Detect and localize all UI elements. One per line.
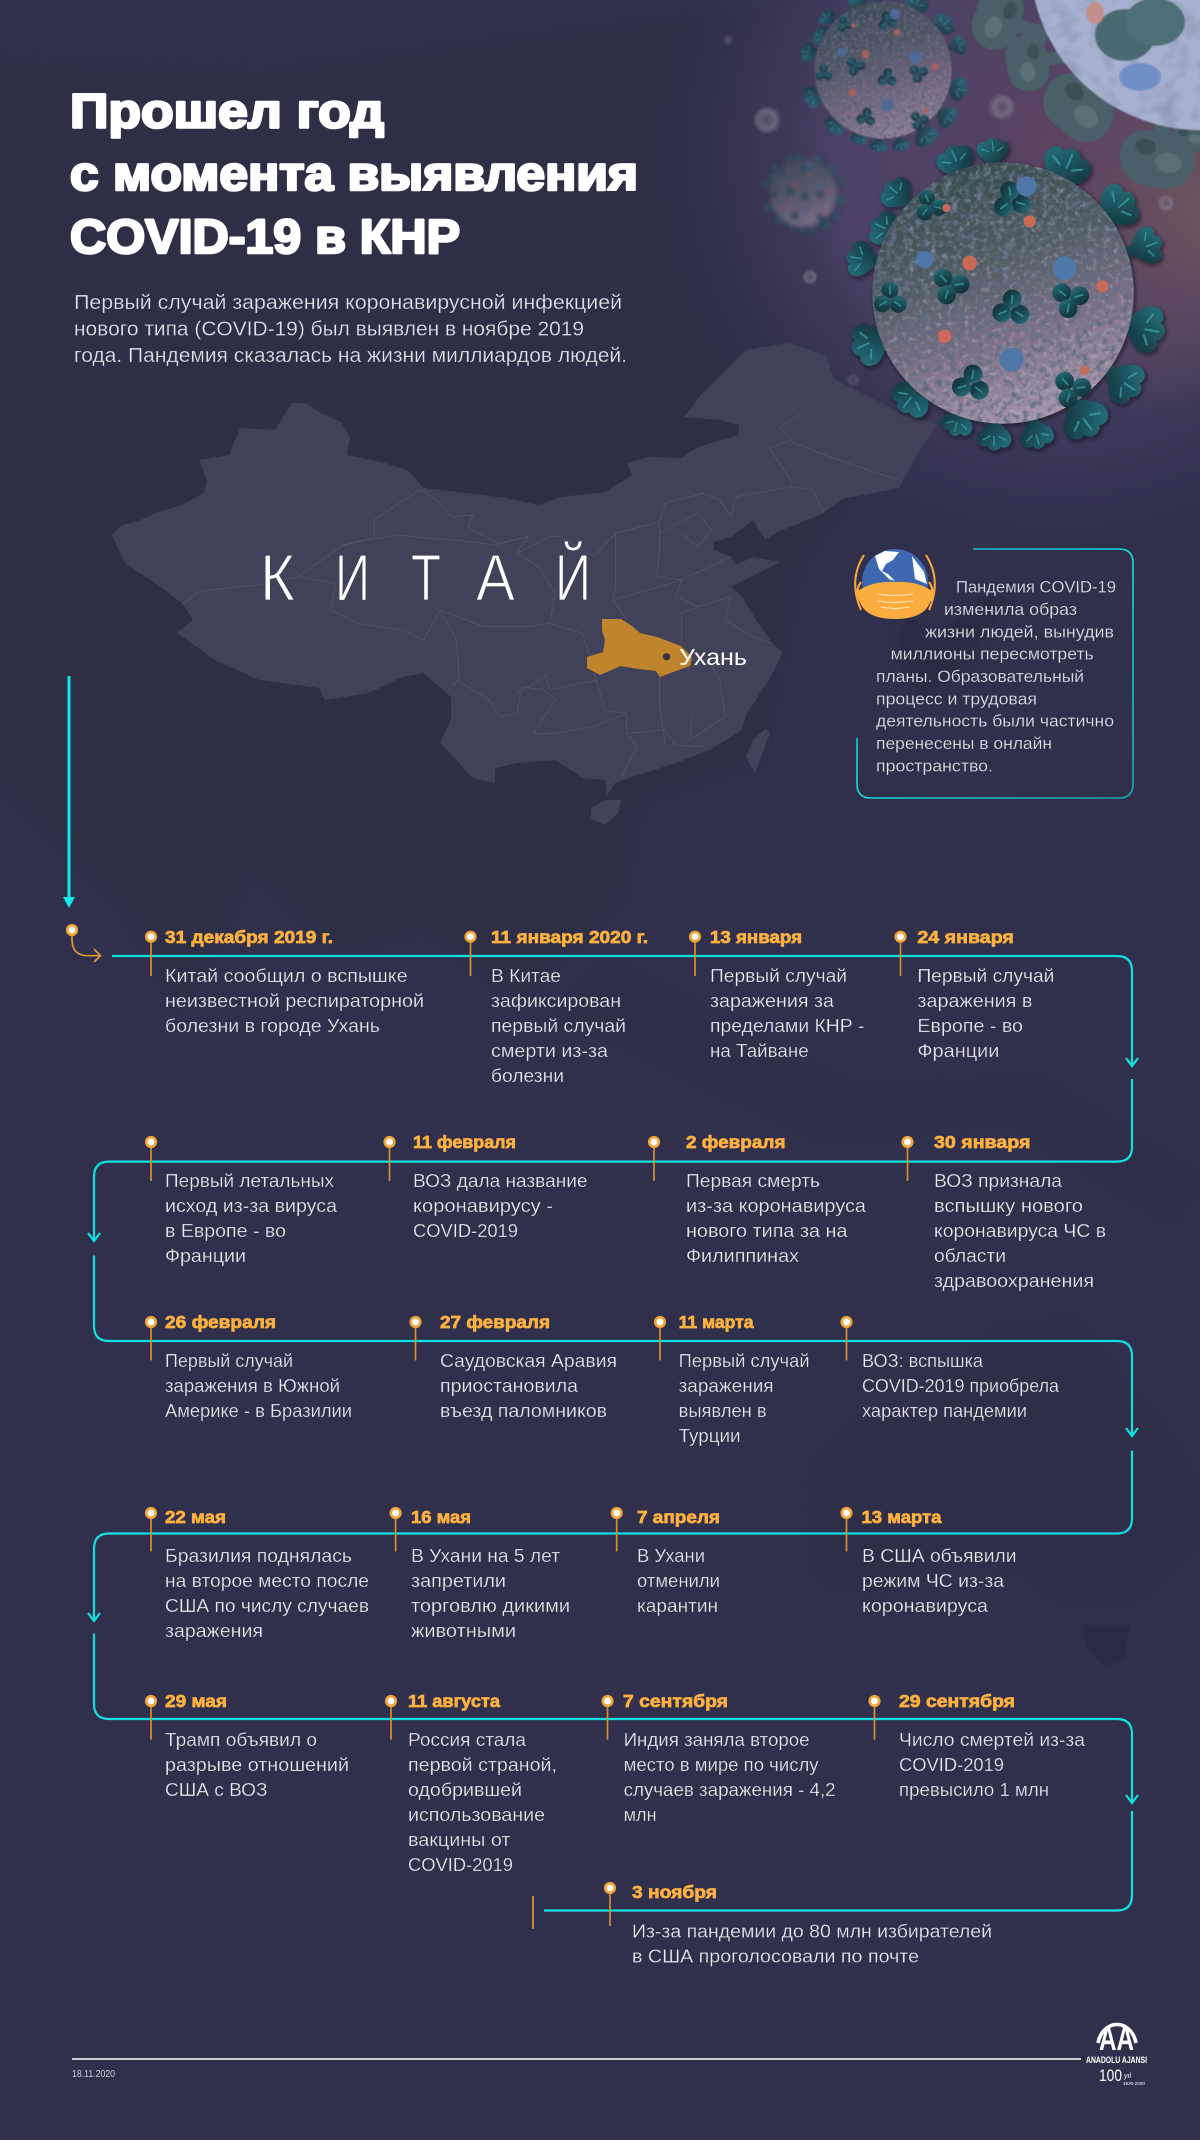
event: 7 апреля (612, 1507, 720, 1616)
event: 29 сентября: Число смертей из-за (899, 1730, 1086, 1750)
subtitle: нового типа (COVID-19) был выявлен в ноябре 2019 (74, 318, 584, 340)
event: 7 сентября (603, 1691, 836, 1825)
event: 29 сентября: 29 сентября (899, 1691, 1015, 1711)
callout text: Пандемия COVID-19 (956, 579, 1116, 597)
event: 11 августа (386, 1691, 557, 1875)
event: 24 января (896, 927, 1054, 1061)
event: ВОЗ пандемия (842, 1317, 1060, 1421)
callout text: изменила образ (944, 601, 1077, 619)
event: 7 апреля: отменили (637, 1571, 720, 1591)
callout text: планы. Образовательный (876, 668, 1084, 686)
subtitle: года. Пандемия сказалась на жизни миллиардов людей. (74, 345, 627, 367)
callout text: процесс и трудовая (876, 690, 1037, 708)
haze behind virus (600, 0, 1200, 560)
event: 22 мая: США по числу случаев (165, 1596, 369, 1616)
Hubei province highlighted (587, 619, 692, 677)
event: 16 мая: животными (411, 1621, 516, 1641)
blurred virus, left (762, 153, 846, 234)
event: 13 января: 13 января (710, 927, 802, 947)
event: 27 февраля: приостановила (440, 1376, 579, 1396)
event: 13 марта: режим ЧС из-за (862, 1571, 1005, 1591)
background virus, top (799, 0, 971, 154)
title (70, 85, 638, 264)
event: 26 февраля: 26 февраля (165, 1312, 276, 1332)
event: 11 февраля (385, 1132, 588, 1241)
China label: И (335, 541, 370, 615)
event: 11 марта: заражения (679, 1376, 774, 1396)
blurred small particles (723, 35, 1175, 387)
event: 2 февраля: нового типа за на (686, 1221, 849, 1241)
event: 11 января 2020: зафиксирован (491, 991, 621, 1011)
logo: Anadolu Ajansi (1086, 2020, 1147, 2086)
timeline end bar (532, 1896, 534, 1929)
event: 11 августа: вакцины от (408, 1830, 510, 1850)
callout text: деятельность были частично (876, 713, 1114, 731)
event: 3 ноября (605, 1882, 992, 1966)
event: 3 ноября: в США проголосовали по почте (632, 1946, 919, 1966)
event: 7 сентября: млн (624, 1805, 657, 1825)
callout text: перенесены в онлайн (876, 735, 1052, 753)
title: COVID-19 в КНР (70, 211, 460, 264)
footer rule (72, 2058, 1081, 2060)
event: 11 марта: 11 марта (679, 1312, 754, 1332)
event: 22 мая: заражения (165, 1621, 263, 1641)
event: 11 февраля: ВОЗ дала название (413, 1171, 588, 1191)
event: 11 марта: Первый случай (679, 1351, 810, 1371)
callout text: пространство. (876, 757, 993, 775)
event: 11 марта (655, 1312, 810, 1446)
event: 27 февраля: въезд паломников (440, 1401, 607, 1421)
event: 2 февраля (649, 1132, 867, 1266)
event: 7 сентября: Индия заняла второе (624, 1730, 810, 1750)
event: 7 сентября: 7 сентября (623, 1691, 728, 1711)
event: 2 февраля: Филиппинах (686, 1246, 799, 1266)
event: ВОЗ пандемия: характер пандемии (862, 1401, 1027, 1421)
event: 7 апреля: карантин (637, 1596, 718, 1616)
event: 30 января (903, 1132, 1106, 1291)
event: 26 февраля (146, 1312, 352, 1421)
event: 7 сентября: место в мире по числу (624, 1755, 819, 1775)
event: 13 января: пределами КНР - (710, 1016, 865, 1036)
event: 11 февраля: коронавирусу - (413, 1196, 553, 1216)
China label: Т (411, 541, 441, 615)
event: 24 января: Европе - во (917, 1016, 1023, 1036)
event: 27 февраля: Саудовская Аравия (440, 1351, 617, 1371)
event: 30 января: ВОЗ признала (934, 1171, 1063, 1191)
event: 30 января: области (934, 1246, 1006, 1266)
event: 11 августа: одобрившей (408, 1780, 522, 1800)
arrow: entry arrow into timeline (63, 676, 75, 908)
event: первый летальный исход (146, 1137, 338, 1266)
event: 22 мая: на второе место после (165, 1571, 369, 1591)
event: 16 мая: запретили (411, 1571, 506, 1591)
callout text (876, 579, 1116, 775)
event: 11 марта: выявлен в (679, 1401, 767, 1421)
event: 13 марта: В США объявили (862, 1546, 1016, 1566)
logo: Anadolu Ajansi: yıl (1123, 2073, 1131, 2080)
event: 24 января: Первый случай (917, 966, 1054, 986)
event: 13 января (690, 927, 865, 1061)
event: 26 февраля: Америке - в Бразилии (165, 1401, 352, 1421)
date stamp: 18.11.2020 (72, 2069, 115, 2080)
background world map: Australia (810, 1320, 1200, 1600)
large virus, top right (965, 0, 1200, 193)
event: 11 августа: первой страной, (408, 1755, 557, 1775)
event: 3 ноября: Из-за пандемии до 80 млн избирателей (632, 1922, 992, 1942)
logo: Anadolu Ajansi: ANADOLU AJANSI (1086, 2055, 1147, 2066)
event: 30 января: коронавируса ЧС в (934, 1221, 1106, 1241)
event: 13 января: Первый случай (710, 966, 847, 986)
logo: Anadolu Ajansi: 100 (1099, 2066, 1122, 2085)
event: 11 августа: 11 августа (408, 1691, 500, 1711)
title: с момента выявления (70, 148, 638, 201)
logo: Anadolu Ajansi: AA (1099, 2020, 1134, 2057)
event: 26 февраля: Первый случай (165, 1351, 293, 1371)
event: 29 мая: США с ВОЗ (165, 1780, 268, 1800)
Wuhan label: Ухань (679, 644, 747, 670)
Wuhan dot (663, 653, 670, 660)
province borders (182, 413, 898, 777)
event: 3 ноября: 3 ноября (632, 1882, 717, 1902)
event: 31 декабря 2019 (146, 927, 424, 1036)
event: ВОЗ пандемия: COVID-2019 приобрела (862, 1376, 1060, 1396)
China label: А (476, 541, 515, 615)
virus illustration (723, 0, 1200, 452)
event: 30 января: вспышку нового (934, 1196, 1083, 1216)
event: 29 сентября: превысило 1 млн (899, 1780, 1049, 1800)
background world map: Tasmania (1080, 1625, 1130, 1668)
event: 29 мая: разрыве отношений (165, 1755, 349, 1775)
title: Прошел год (70, 85, 384, 138)
event: 24 января: заражения в (917, 991, 1032, 1011)
subtitle (74, 292, 627, 367)
event: 11 января 2020: В Китае (491, 966, 561, 986)
China label (260, 540, 591, 615)
event: 29 сентября: COVID-2019 (899, 1755, 1004, 1775)
Taiwan (746, 728, 770, 773)
event: 11 августа: использование (408, 1805, 545, 1825)
event: 13 января: на Тайване (710, 1041, 809, 1061)
event: 7 апреля: 7 апреля (637, 1507, 720, 1527)
icon: globe with mask (855, 549, 935, 619)
event: 11 января 2020: болезни (491, 1066, 564, 1086)
event: 27 февраля (411, 1312, 617, 1421)
event: 29 сентября (870, 1691, 1086, 1800)
event: 11 марта: Турции (679, 1426, 741, 1446)
event: ВОЗ пандемия: ВОЗ: вспышка (862, 1351, 984, 1371)
event: 11 февраля: 11 февраля (413, 1132, 516, 1152)
China outline (112, 343, 937, 795)
event: 30 января: здравоохранения (934, 1271, 1094, 1291)
event: 29 мая (146, 1691, 349, 1800)
event: первый летальный исход: исход из-за вируса (165, 1196, 338, 1216)
event: 24 января: 24 января (917, 927, 1014, 947)
callout panel (855, 549, 1133, 798)
start marker with orange arrow (67, 925, 100, 962)
event: первый летальный исход: в Европе - во (165, 1221, 286, 1241)
event: 27 февраля: 27 февраля (440, 1312, 550, 1332)
map of China (112, 343, 937, 825)
event: 2 февраля: 2 февраля (686, 1132, 786, 1152)
event: 22 мая: Бразилия поднялась (165, 1546, 352, 1566)
event: 13 января: заражения за (710, 991, 835, 1011)
background world map: Eurasia (0, 0, 900, 1010)
event: 31 декабря 2019: болезни в городе Ухань (165, 1016, 380, 1036)
background world map: Japan and Korea (895, 590, 1010, 700)
subtitle: Первый случай заражения коронавирусной инфекцией (74, 292, 622, 314)
event: 7 сентября: случаев заражения - 4,2 (624, 1780, 836, 1800)
event: 11 января 2020: смерти из-за (491, 1041, 609, 1061)
event: 26 февраля: заражения в Южной (165, 1376, 340, 1396)
event: первый летальный исход: Первый летальных (165, 1171, 334, 1191)
China label: Й (555, 540, 591, 615)
event: 2 февраля: Первая смерть (686, 1171, 820, 1191)
event: 13 марта: коронавируса (862, 1596, 989, 1616)
event: 11 февраля: COVID-2019 (413, 1221, 518, 1241)
callout text: миллионы пересмотреть (891, 646, 1094, 664)
event: 11 августа: COVID-2019 (408, 1855, 513, 1875)
Hainan (591, 800, 621, 825)
event: 16 мая (391, 1507, 570, 1641)
event: 11 января 2020 (466, 927, 648, 1086)
callout frame (857, 549, 1133, 798)
main virus (843, 137, 1170, 452)
event: 16 мая: В Ухани на 5 лет (411, 1546, 560, 1566)
event: 11 января 2020: первый случай (491, 1016, 626, 1036)
event: 13 марта (842, 1507, 1016, 1616)
event: 29 мая: Трамп объявил о (165, 1730, 317, 1750)
event: 11 августа: Россия стала (408, 1730, 527, 1750)
event: 16 мая: торговлю дикими (411, 1596, 570, 1616)
event: 31 декабря 2019: Китай сообщил о вспышке (165, 966, 408, 986)
logo: Anadolu Ajansi: 1920-2020 (1123, 2081, 1145, 2086)
event: 29 мая: 29 мая (165, 1691, 227, 1711)
event: 7 апреля: В Ухани (637, 1546, 705, 1566)
timeline path (88, 956, 1138, 1910)
event: 31 декабря 2019: 31 декабря 2019 г. (165, 927, 333, 947)
event: 13 марта: 13 марта (862, 1507, 942, 1527)
event: первый летальный исход: Франции (165, 1246, 246, 1266)
event: 22 мая: 22 мая (165, 1507, 226, 1527)
event: 22 мая (146, 1507, 369, 1641)
event: 24 января: Франции (917, 1041, 999, 1061)
callout text: жизни людей, вынудив (925, 623, 1114, 641)
China label: К (260, 541, 295, 615)
event: 11 января 2020: 11 января 2020 г. (491, 927, 648, 947)
background world map: Indonesia (560, 960, 1200, 1220)
event: 2 февраля: из-за коронавируса (686, 1196, 867, 1216)
event: 31 декабря 2019: неизвестной респираторной (165, 991, 424, 1011)
event: 16 мая: 16 мая (411, 1507, 471, 1527)
event: 30 января: 30 января (934, 1132, 1030, 1152)
